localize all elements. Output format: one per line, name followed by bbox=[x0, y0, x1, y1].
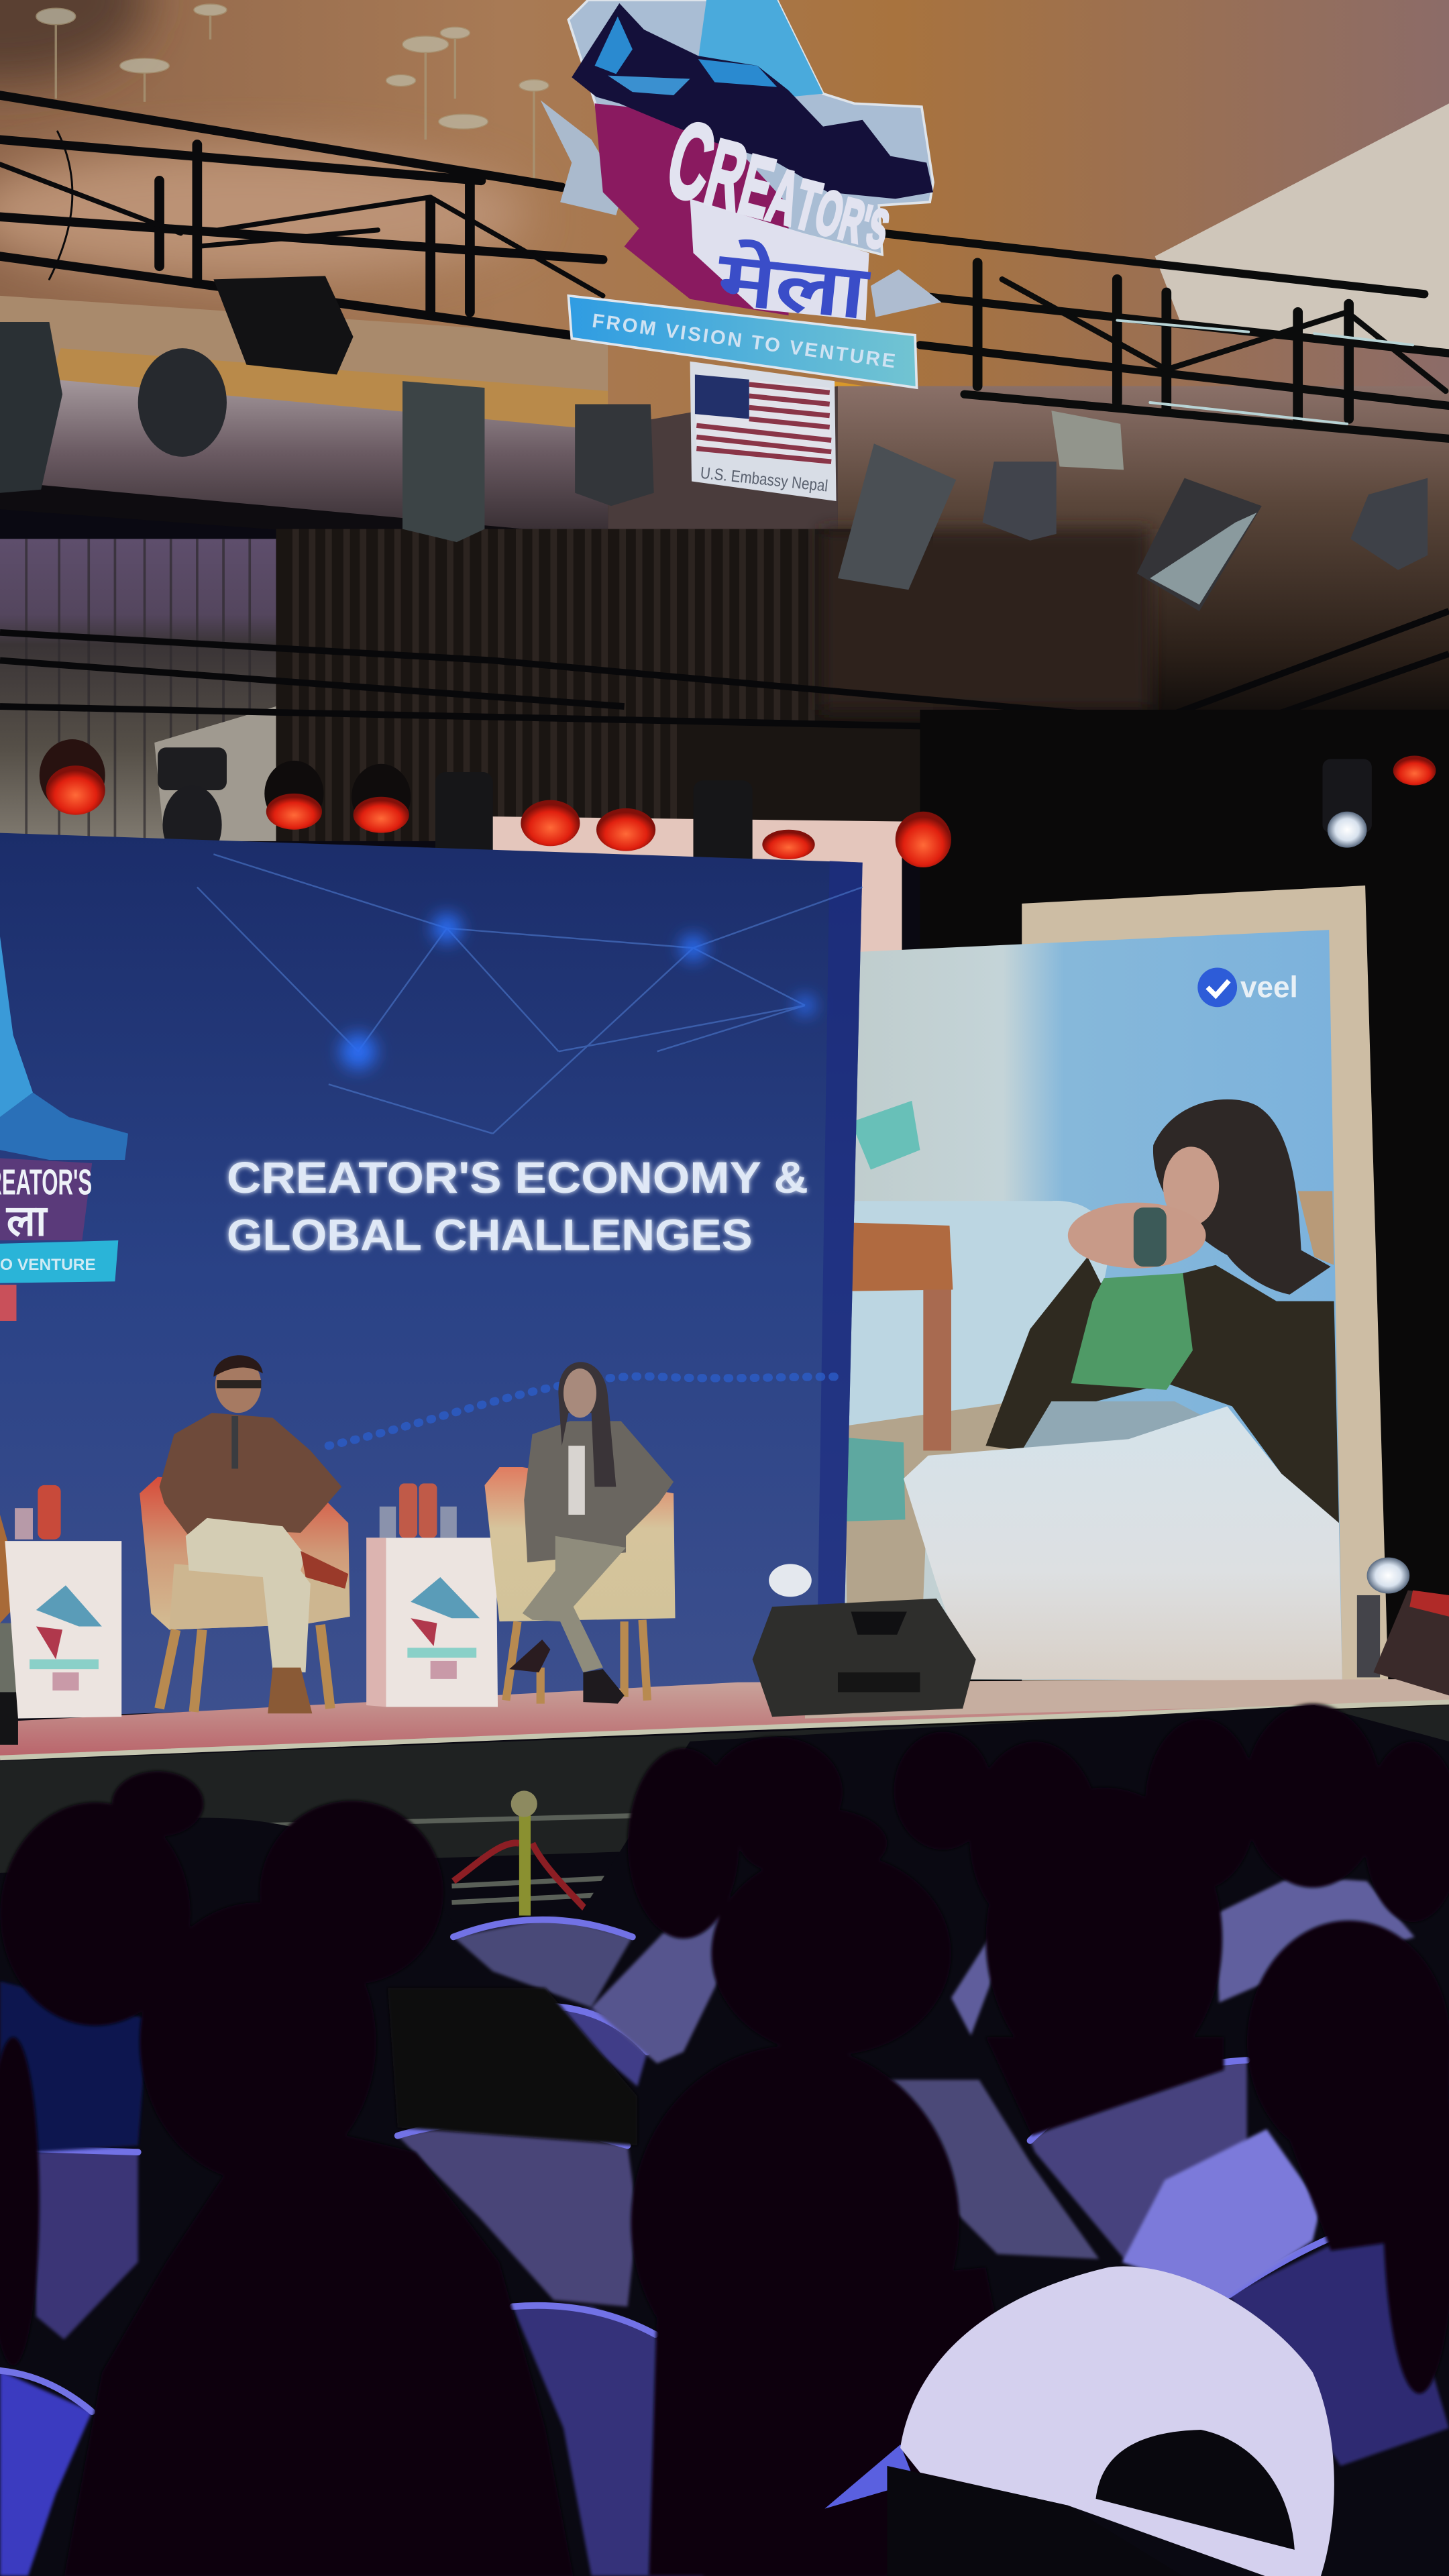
red and white stage lights bbox=[40, 739, 1436, 900]
sign: CREATOR'S wordmark: CREATOR'S bbox=[656, 99, 906, 272]
audience: silhouettes bbox=[0, 1704, 1449, 2576]
ad: side table bbox=[839, 1222, 953, 1450]
sign: mountain highlights bbox=[595, 16, 777, 95]
cap opening bbox=[1095, 2430, 1295, 2550]
ad: jeans bbox=[1022, 1401, 1216, 1450]
upper lighting truss right bbox=[882, 233, 1449, 439]
cap body bbox=[900, 2266, 1334, 2576]
screen: dotted wave bbox=[329, 1377, 838, 1446]
right display frame bbox=[1022, 885, 1388, 1680]
sign: US flag and embassy label bbox=[690, 362, 837, 501]
red light 8 bbox=[1393, 756, 1436, 786]
woman face bbox=[564, 1368, 596, 1417]
sign: left star bbox=[541, 100, 623, 215]
ad: veel logo bbox=[1197, 967, 1298, 1007]
sign: Devanagari wordmark: मेला bbox=[713, 236, 874, 333]
monitor stage light bbox=[769, 1564, 812, 1597]
right display ad bbox=[837, 930, 1342, 1680]
spotlight 9 bbox=[1350, 478, 1428, 570]
sign: right star bbox=[871, 270, 941, 317]
center side table bbox=[366, 1483, 498, 1707]
sign: white letter mass bbox=[690, 199, 869, 321]
screen: title: CREATOR'S ECONOMY & bbox=[227, 1153, 808, 1203]
ad: hair bbox=[1153, 1099, 1331, 1295]
cap visor bbox=[824, 2445, 915, 2509]
right stage light and speaker bbox=[1357, 1558, 1449, 1695]
spotlight 7 bbox=[982, 462, 1057, 541]
woman trousers bbox=[523, 1536, 626, 1672]
ad: face bbox=[1163, 1146, 1219, 1226]
rear stage frame behind main screen bbox=[490, 816, 902, 961]
stage steps bbox=[204, 1815, 647, 1902]
table bottle and glass bbox=[15, 1485, 61, 1540]
main LED screen bbox=[0, 833, 863, 1719]
screen: left logo: O VENTURE bbox=[0, 1256, 96, 1274]
stage monitor speaker bbox=[753, 1564, 976, 1717]
ad: mug bbox=[1134, 1208, 1167, 1267]
upper stage spotlights bbox=[0, 276, 1428, 611]
screen: left logo bbox=[0, 936, 128, 1321]
ceiling mounted fixture bbox=[1051, 411, 1124, 470]
person at left edge of stage bbox=[0, 1515, 19, 1745]
red light 6 bbox=[762, 830, 815, 859]
woman shoes bbox=[509, 1640, 625, 1704]
red light 3 bbox=[352, 764, 411, 833]
back wall with slats bbox=[276, 529, 1150, 841]
ad: phone box bbox=[851, 1101, 920, 1170]
ad: hands bbox=[1068, 1203, 1206, 1269]
wearer neck bbox=[887, 2466, 1183, 2576]
woman hair bbox=[558, 1362, 616, 1487]
woman jacket bbox=[524, 1421, 674, 1562]
spotlight 8 bbox=[1137, 478, 1262, 611]
ad: veel logo: veel bbox=[1240, 971, 1298, 1004]
sign: sky peak bbox=[698, 0, 823, 99]
ad: green top bbox=[1071, 1273, 1193, 1390]
sign: mountains bbox=[572, 3, 933, 199]
woman shirt bbox=[568, 1446, 585, 1515]
red light 4 bbox=[521, 800, 580, 846]
stanchion post with red rope bbox=[453, 1790, 595, 1919]
red light 7 bbox=[896, 812, 951, 867]
man head bbox=[215, 1357, 261, 1413]
stage floor bbox=[0, 1679, 1449, 1902]
ad: pillow bbox=[904, 1406, 1342, 1680]
upper lighting truss left bbox=[0, 95, 603, 335]
sign: tagline banner: FROM VISION TO VENTURE bbox=[591, 310, 897, 372]
sign: magenta block bbox=[595, 103, 789, 315]
ad: teal stool bbox=[845, 1438, 905, 1521]
sign: US flag and embassy label: U.S. Embassy Nepal bbox=[700, 464, 828, 496]
armchair bbox=[484, 1467, 676, 1621]
audience: seat backs bbox=[0, 1917, 1449, 2576]
ad: jacket bbox=[985, 1256, 1339, 1523]
lower truss bbox=[0, 611, 1449, 759]
sign: map outline bbox=[568, 0, 933, 255]
spotlight 3 bbox=[213, 276, 354, 374]
man hair bbox=[213, 1355, 263, 1377]
table logo bbox=[407, 1577, 480, 1679]
ad: floor and sofa base bbox=[845, 1397, 1051, 1679]
spotlight 1 bbox=[0, 322, 62, 493]
table bottles and glasses bbox=[380, 1483, 457, 1538]
audience seating and people bbox=[0, 1704, 1449, 2576]
screen: title: GLOBAL CHALLENGES bbox=[227, 1211, 753, 1260]
ad: sofa bbox=[839, 1201, 1108, 1433]
female speaker in armchair bbox=[484, 1362, 676, 1704]
audience: seat rims bbox=[0, 1920, 1387, 2412]
ad: sofa behind hair bbox=[1298, 1191, 1334, 1265]
spotlight 4 bbox=[402, 381, 484, 542]
screen: glowing nodes bbox=[340, 914, 815, 1069]
white cap in foreground bbox=[824, 2266, 1334, 2576]
audience: clothing bbox=[0, 1876, 1415, 2303]
man shoes bbox=[268, 1551, 348, 1713]
chandelier ornaments on ceiling bbox=[36, 4, 549, 180]
screen: title bbox=[227, 1153, 808, 1260]
white light far right bbox=[1322, 759, 1372, 848]
man glasses bbox=[217, 1380, 261, 1388]
white light center bbox=[435, 772, 493, 889]
male speaker in armchair bbox=[140, 1355, 350, 1713]
event logo sign bbox=[541, 0, 941, 501]
stage left side table bbox=[5, 1485, 121, 1719]
audience: dark base bbox=[0, 1705, 1449, 2576]
armchair bbox=[140, 1477, 350, 1629]
dark band under right wall bbox=[920, 710, 1449, 1728]
sign: tagline banner bbox=[568, 296, 917, 388]
man trousers bbox=[186, 1518, 311, 1672]
microphone bbox=[231, 1416, 238, 1468]
spotlight 2 bbox=[138, 348, 227, 457]
spotlight 6 bbox=[838, 443, 956, 590]
left window panel bbox=[0, 539, 276, 841]
screen: left logo: ला bbox=[6, 1197, 48, 1245]
man torso bbox=[160, 1413, 341, 1536]
red light 2 bbox=[264, 761, 323, 830]
red light left bbox=[40, 739, 105, 815]
spotlight 5 bbox=[575, 404, 654, 506]
white light left bbox=[158, 747, 227, 872]
table logo bbox=[30, 1585, 102, 1690]
white light right bbox=[693, 780, 753, 900]
screen: network lines bbox=[197, 854, 863, 1134]
red light 5 bbox=[596, 808, 655, 851]
